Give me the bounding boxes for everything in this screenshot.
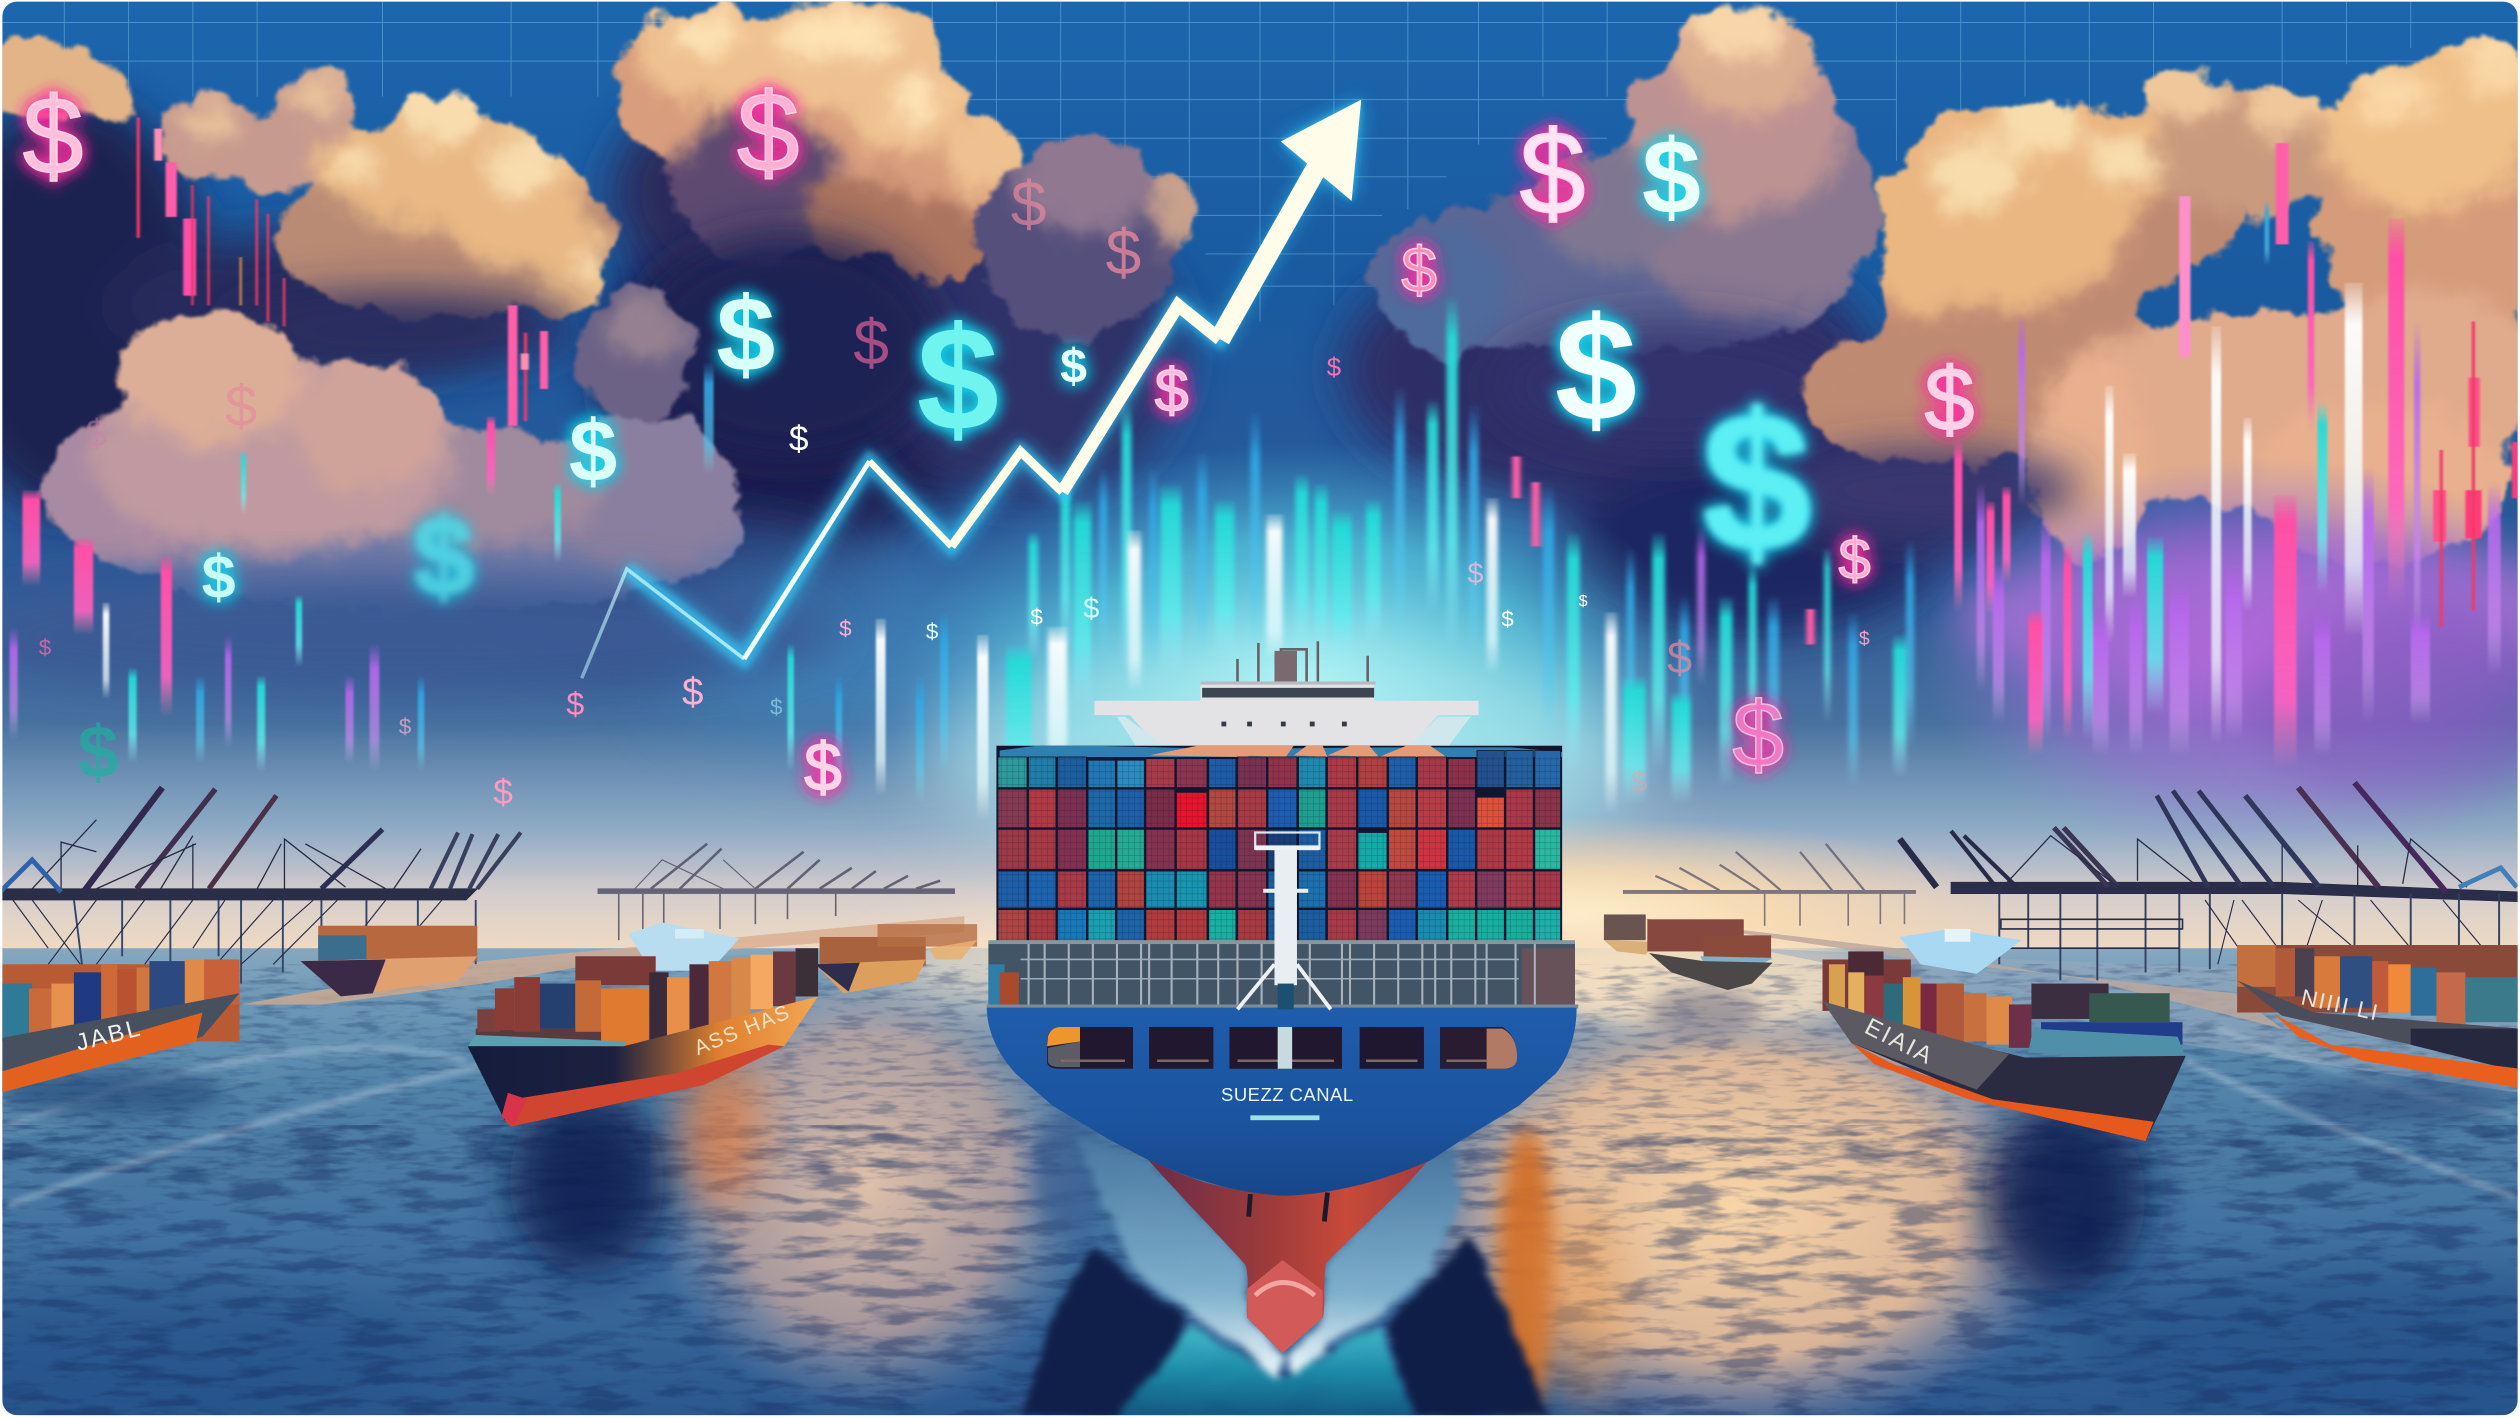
ship: left background bbox=[301, 926, 477, 996]
dollar signs: large pink glowing: $ bbox=[23, 76, 83, 198]
dollar signs: small and dim: $ bbox=[1579, 592, 1588, 610]
dollar signs: large cyan glowing: $ bbox=[413, 497, 474, 619]
dollar signs: large pink glowing: $ bbox=[804, 731, 842, 806]
water surface with sunset reflections bbox=[0, 900, 2520, 1418]
dollar signs: large cyan glowing: $ bbox=[917, 297, 999, 462]
ship: far right bbox=[2237, 945, 2520, 1088]
candlestick streaks: left side bbox=[10, 117, 988, 820]
dollar signs: small and dim: $ bbox=[853, 306, 889, 378]
cranes: right far terminal bbox=[1623, 844, 1916, 926]
dollar signs: large cyan glowing: $ bbox=[1555, 287, 1637, 452]
cloud: mauve centre pieces bbox=[580, 137, 1196, 421]
rising arrow line bbox=[582, 100, 1361, 678]
ship: far left bbox=[0, 959, 239, 1093]
ship: left orange hull bbox=[468, 923, 818, 1127]
ship name: SUEZZ CANAL bbox=[1221, 1084, 1354, 1105]
cranes: left far terminal bbox=[598, 844, 955, 940]
lashing deck frames bbox=[987, 940, 1578, 1008]
blue haze around lower arrow bbox=[659, 554, 1077, 747]
sunset glow on horizon bbox=[1077, 816, 2041, 1016]
glow behind main ship bbox=[900, 442, 1704, 924]
dollar signs: large pink glowing: $ bbox=[1839, 527, 1871, 591]
dollar signs: large cyan glowing bbox=[202, 118, 1811, 619]
hull bbox=[987, 1008, 1577, 1196]
water ripple texture: coarse bbox=[0, 1125, 2520, 1418]
dollar signs: large pink glowing: $ bbox=[1519, 107, 1586, 240]
dollar signs: large cyan glowing: $ bbox=[1060, 339, 1087, 393]
cloud: right bank peach bbox=[1800, 42, 2520, 563]
dollar signs: small and dim: $ bbox=[789, 419, 809, 458]
dollar signs: small and dim: $ bbox=[682, 671, 703, 714]
glow on right chart streaks bbox=[1921, 458, 2520, 860]
red bulbous bow bbox=[1146, 1154, 1434, 1353]
ship: right grey hull with orange keel: EIAIA bbox=[1860, 1013, 1938, 1071]
dollar signs: large pink glowing bbox=[23, 69, 1974, 806]
shading: fade base of lower left cloud into sky bbox=[0, 577, 836, 693]
ship: far left: JABL bbox=[73, 1014, 145, 1057]
dollar signs: large cyan glowing: $ bbox=[716, 275, 775, 393]
cranes: right near terminal bbox=[1900, 783, 2520, 980]
ship: right distant pair bbox=[1604, 914, 1773, 990]
dollar signs: small and dim: $ bbox=[1106, 216, 1141, 288]
ship: far right: NIIII LI bbox=[2299, 985, 2382, 1025]
dollar signs: large cyan glowing: $ bbox=[1642, 118, 1701, 236]
dollar signs: small and dim: $ bbox=[1631, 767, 1647, 799]
bridge superstructure bbox=[1094, 641, 1479, 749]
dollar signs: small and dim: $ bbox=[493, 773, 513, 812]
dollar signs: large pink glowing: $ bbox=[1401, 234, 1437, 306]
cranes: left near terminal bbox=[0, 788, 521, 990]
reflections and shadows on water bbox=[0, 988, 2507, 1411]
dollar signs: small and dim: $ bbox=[1859, 629, 1870, 650]
dollar signs: small and dim: $ bbox=[839, 616, 852, 641]
dollar signs: small and dim: $ bbox=[77, 711, 119, 794]
dollar signs: small and dim: $ bbox=[926, 619, 939, 644]
dollar signs: large cyan glowing: $ bbox=[202, 543, 236, 611]
dollar signs: large cyan glowing: $ bbox=[569, 403, 617, 500]
dollar signs: small and dim: $ bbox=[1667, 632, 1692, 683]
hull windows bbox=[1047, 1027, 1517, 1069]
dollar signs: small and dim: $ bbox=[566, 686, 584, 722]
dollar signs: large pink glowing: $ bbox=[1924, 350, 1974, 450]
dollar signs: large pink glowing: $ bbox=[1155, 357, 1189, 425]
sky background bbox=[0, 0, 2520, 964]
dollar signs: small and dim: $ bbox=[1011, 168, 1046, 240]
dollar signs: small and dim: $ bbox=[399, 714, 412, 739]
shading: dark base below peach clouds bbox=[286, 201, 949, 420]
shore strips bbox=[241, 916, 2282, 1029]
dollar signs: small and dim: $ bbox=[1327, 354, 1341, 382]
shading: dark base below right mauve cloud bbox=[1495, 321, 1848, 450]
wake: troughs, foam and teal water at main ship bow bbox=[1021, 1133, 1551, 1418]
dollar signs: small and dim: $ bbox=[39, 635, 52, 660]
bridge wing mast tower bbox=[1238, 833, 1331, 1069]
cloud: left bank peach bbox=[0, 39, 612, 315]
candlestick streaks: right pink and violet bbox=[1954, 143, 2518, 768]
dollar signs: small and dim bbox=[39, 168, 1870, 812]
main ship bbox=[987, 641, 1578, 1353]
dollar signs: small and dim: $ bbox=[225, 375, 257, 439]
dark storm clouds behind bbox=[0, 96, 2025, 667]
horizon fog bbox=[0, 723, 2520, 964]
dollar signs: large pink glowing: $ bbox=[737, 69, 800, 195]
dollar signs: large cyan glowing: $ bbox=[1702, 373, 1811, 592]
dollar signs: small and dim: $ bbox=[1467, 558, 1483, 590]
dollar signs: small and dim: $ bbox=[770, 695, 783, 720]
dollar signs: small and dim: $ bbox=[1501, 606, 1514, 631]
ship: left distant pair bbox=[815, 924, 977, 993]
dollar signs: small and dim: $ bbox=[1083, 593, 1099, 625]
cloud: lower left mauve and pink bbox=[43, 313, 739, 609]
dollar signs: small and dim: $ bbox=[1030, 605, 1043, 630]
dollar signs: small and dim: $ bbox=[86, 412, 107, 455]
ship wakes on water bbox=[8, 1029, 2515, 1205]
candlestick streaks: centre cyan bbox=[1006, 296, 1914, 813]
cloud: centre right mauve peak bbox=[1366, 6, 1880, 354]
ship: right grey hull with orange keel bbox=[1822, 929, 2186, 1141]
dollar signs: large pink glowing: $ bbox=[1732, 682, 1784, 786]
container stack bbox=[996, 746, 1562, 943]
ship: left orange hull: ASS HAS bbox=[691, 1000, 794, 1060]
water ripple texture: fine bbox=[0, 964, 2520, 1173]
cloud: centre top peach bbox=[614, 2, 1025, 286]
name underline bbox=[1250, 1115, 1319, 1120]
shading: fade cloud bases on right bbox=[1776, 452, 2520, 696]
chart grid in sky bbox=[0, 0, 2520, 321]
